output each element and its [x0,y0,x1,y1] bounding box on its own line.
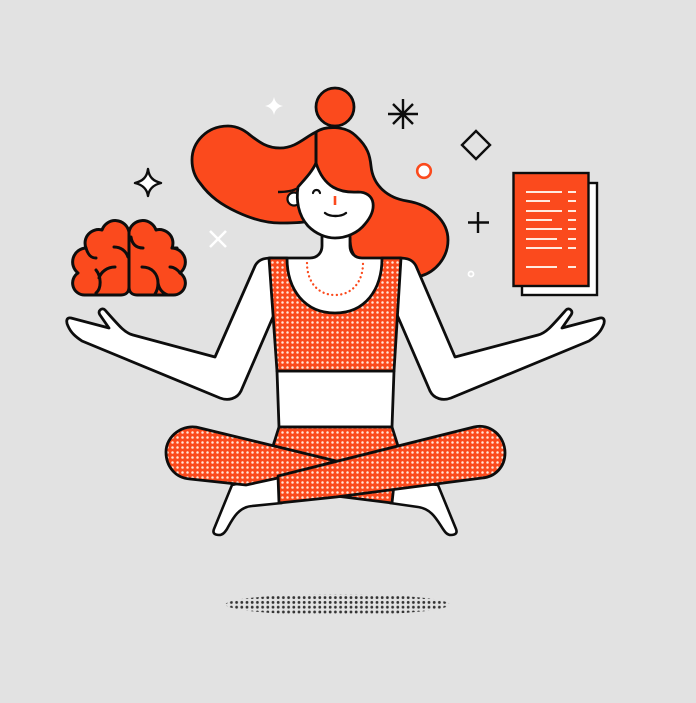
icon: outlined sparkle [135,169,161,196]
eye [313,190,320,193]
ear [288,192,300,206]
arms and shoulders [67,258,604,399]
right foot [390,480,457,535]
hair: left flowing side [192,126,316,223]
hair parting [315,132,317,163]
document text lines [526,192,576,267]
left arm [67,258,276,399]
back page [522,183,597,295]
right arm [395,258,604,399]
document [514,173,597,295]
hair: right flowing side [316,128,448,276]
nose [334,196,336,205]
smile [325,213,346,216]
icon: diamond [462,131,490,159]
icon: brain [73,221,185,295]
icon: plus [468,212,489,233]
icon: orange ring [417,164,431,178]
icon: white cross [210,231,226,247]
shorts pelvis [273,427,398,503]
face [278,132,373,238]
left leg [166,427,336,485]
right leg [278,426,505,503]
shadow [226,594,450,615]
tank top [269,258,401,371]
hair strand [278,188,298,192]
left foot [213,474,282,535]
hair bun [316,88,354,126]
necklace [307,263,363,295]
icon: white sparkle [265,97,283,115]
front page [514,173,588,286]
icon: small white circle [468,272,474,276]
midriff [277,371,394,427]
icon: asterisk star [388,99,418,129]
neck and chest [269,232,401,316]
